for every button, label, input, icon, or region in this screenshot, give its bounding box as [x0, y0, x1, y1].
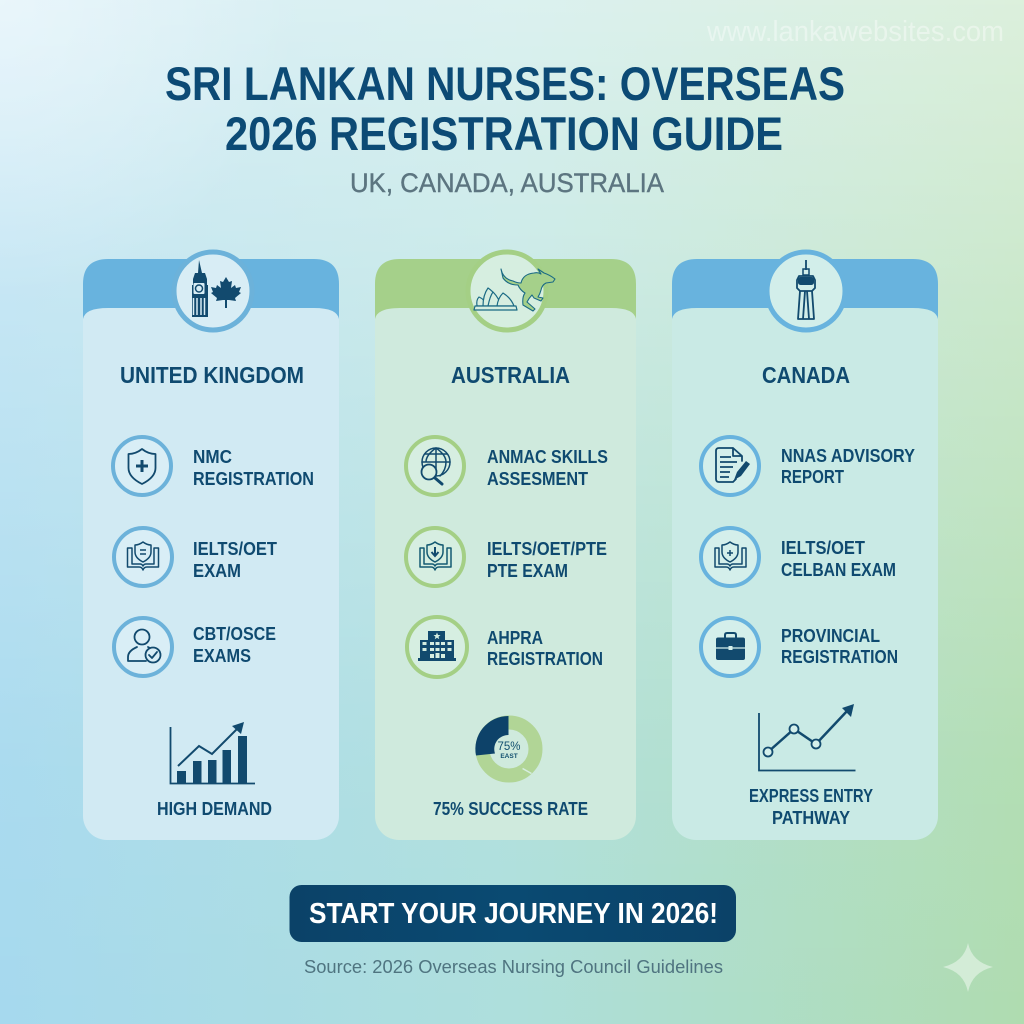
panel: United Kingdom	[83, 252, 339, 840]
icon: Big Ben and maple leaf	[174, 252, 252, 330]
icon: CN Tower	[767, 252, 845, 330]
item: ANMAC skills assessment	[406, 437, 608, 495]
item: CBT/OSCE exams: EXAMS	[193, 645, 251, 666]
item: ANMAC skills assessment: ANMAC SKILLS	[487, 446, 608, 467]
item: IELTS/OET exam: IELTS/OET	[193, 538, 278, 559]
donut chart: 75% success rate: EAST	[500, 753, 518, 760]
icon: sparkle	[943, 943, 993, 992]
bar chart: high demand	[170, 722, 255, 784]
item: IELTS/OET CELBAN exam: CELBAN EXAM	[781, 559, 896, 580]
heading: Canada: CANADA	[762, 362, 850, 388]
item: CBT/OSCE exams	[114, 618, 276, 676]
item: NNAS advisory report	[701, 437, 916, 495]
item: IELTS/OET exam: EXAM	[193, 560, 241, 581]
call to action button: START YOUR JOURNEY IN 2026!	[309, 898, 718, 930]
item: provincial registration: PROVINCIAL	[781, 625, 880, 646]
item: NNAS advisory report: NNAS ADVISORY	[781, 445, 916, 466]
caption: express entry pathway	[749, 785, 874, 828]
item: ANMAC skills assessment: ASSESMENT	[487, 468, 589, 489]
heading: Australia: AUSTRALIA	[451, 362, 570, 388]
caption: high demand: HIGH DEMAND	[157, 798, 272, 819]
heading: United Kingdom: UNITED KINGDOM	[120, 362, 304, 388]
donut chart: 75% success rate	[475, 716, 536, 776]
item: NNAS advisory report: REPORT	[781, 466, 845, 487]
caption: 75% success rate: 75% SUCCESS RATE	[433, 798, 588, 819]
watermark: www.lankawebsites.com	[706, 16, 1004, 48]
item: provincial registration	[701, 618, 898, 676]
source note: Source: 2026 Overseas Nursing Council Guidelines	[304, 956, 723, 977]
donut chart: 75% success rate: 75%	[498, 741, 520, 753]
item: provincial registration: REGISTRATION	[781, 646, 898, 667]
title	[165, 57, 845, 160]
item: AHPRA registration: REGISTRATION	[487, 648, 603, 669]
caption: express entry pathway: EXPRESS ENTRY	[749, 785, 874, 806]
item: IELTS/OET exam	[114, 528, 278, 586]
item: IELTS/OET/PTE exam: PTE EXAM	[487, 560, 568, 581]
item: NMC registration: NMC	[193, 446, 232, 467]
item: CBT/OSCE exams: CBT/OSCE	[193, 623, 276, 644]
panel: Australia	[375, 252, 636, 840]
title: 2026 REGISTRATION GUIDE	[225, 107, 783, 160]
item: IELTS/OET CELBAN exam	[701, 528, 896, 586]
line chart: express entry pathway	[759, 704, 856, 770]
subtitle: UK, CANADA, AUSTRALIA	[350, 168, 664, 198]
item: AHPRA registration: AHPRA	[487, 627, 543, 648]
call to action button	[290, 885, 736, 942]
item: IELTS/OET CELBAN exam: IELTS/OET	[781, 537, 866, 558]
item: IELTS/OET/PTE exam	[406, 528, 607, 586]
caption: express entry pathway: PATHWAY	[772, 807, 851, 828]
item: NMC registration: REGISTRATION	[193, 468, 314, 489]
panel: Canada	[672, 252, 938, 840]
title: SRI LANKAN NURSES: OVERSEAS	[165, 57, 845, 110]
item: IELTS/OET/PTE exam: IELTS/OET/PTE	[487, 538, 607, 559]
item: AHPRA registration	[407, 617, 603, 677]
icon: Sydney Opera House and kangaroo	[468, 252, 555, 330]
item: NMC registration	[113, 437, 314, 495]
